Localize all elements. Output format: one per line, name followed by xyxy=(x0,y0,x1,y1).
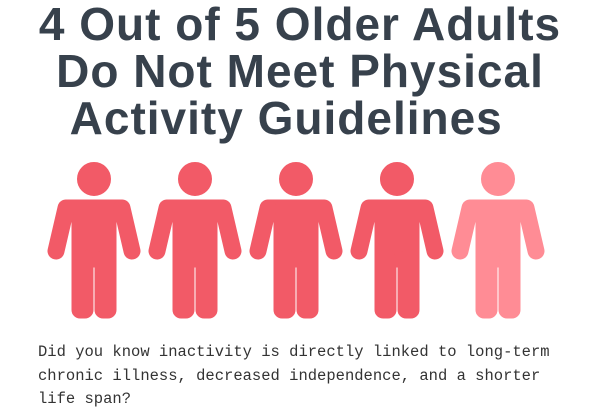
body text: chronic illness, decreased independence, and a shorter xyxy=(38,366,540,384)
figure 2 xyxy=(157,162,233,318)
figure 1 xyxy=(56,162,132,318)
figure 5 (light) xyxy=(460,162,536,318)
title: Activity Guidelines xyxy=(70,92,503,144)
body text xyxy=(38,343,550,408)
figure 4 xyxy=(359,162,435,318)
figure 3 xyxy=(258,162,334,318)
title: Do Not Meet Physical xyxy=(56,45,544,97)
body text: Did you know inactivity is directly linked to long-term xyxy=(38,343,550,361)
body text: life span? xyxy=(38,390,131,408)
title xyxy=(39,0,561,144)
